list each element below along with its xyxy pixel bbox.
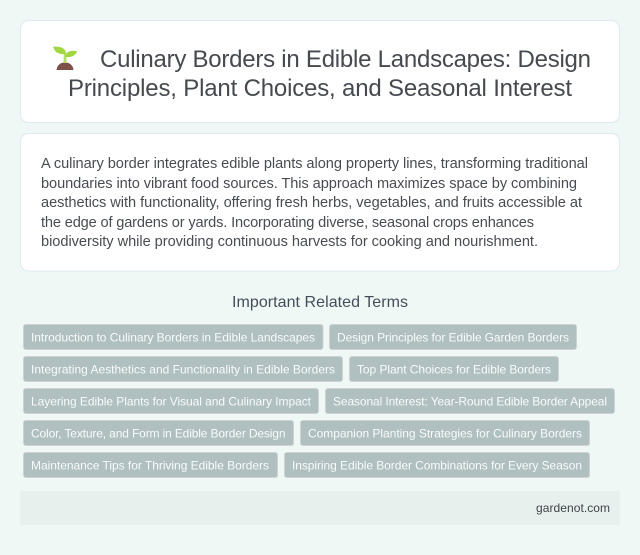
- chip: Color, Texture, and Form in Edible Border Design: [31, 426, 286, 440]
- chip: Inspiring Edible Border Combinations for Every Season: [292, 458, 582, 472]
- text block: description: biodiversity while providing continuous harvests for cooking and nourishment.: [41, 234, 538, 250]
- chip: Introduction to Culinary Borders in Edible Landscapes: [31, 330, 315, 344]
- chip: [24, 452, 278, 478]
- chip: Integrating Aesthetics and Functionality in Edible Borders: [31, 362, 335, 376]
- text block: description: [41, 156, 588, 250]
- panel: term chips: [24, 324, 614, 478]
- chip: Layering Edible Plants for Visual and Culinary Impact: [31, 394, 312, 408]
- chip: Design Principles for Edible Garden Borders: [337, 330, 569, 344]
- title: Culinary Borders in Edible Landscapes: Design: [100, 46, 591, 73]
- chip: [24, 356, 342, 382]
- footer: [20, 491, 620, 525]
- chip: [24, 324, 323, 350]
- text block: description: aesthetics with functionality, offering fresh herbs, vegetables, and fruits accessible at: [41, 195, 582, 211]
- chip: [24, 388, 318, 414]
- title: [68, 46, 591, 102]
- icon: seedling: [53, 47, 77, 70]
- chip: Seasonal Interest: Year-Round Edible Border Appeal: [333, 394, 607, 408]
- chip: [300, 420, 590, 446]
- title: Principles, Plant Choices, and Seasonal Interest: [68, 75, 572, 102]
- chip: [330, 324, 576, 350]
- chip: Top Plant Choices for Edible Borders: [357, 362, 551, 376]
- chip: [326, 388, 614, 414]
- footer: gardenot.com: [536, 501, 610, 515]
- chip: Companion Planting Strategies for Culinary Borders: [308, 426, 582, 440]
- chip: [284, 452, 590, 478]
- text block: description: A culinary border integrates edible plants along property lines, transforming traditional: [41, 156, 588, 172]
- panel: title card: [20, 20, 620, 122]
- panel: description: [20, 134, 620, 271]
- chip: [350, 356, 558, 382]
- text block: description: the edge of gardens or yards. Incorporating diverse, seasonal crops enhances: [41, 215, 534, 231]
- chip: [24, 420, 294, 446]
- heading: related terms: Important Related Terms: [232, 294, 408, 311]
- chip: Maintenance Tips for Thriving Edible Borders: [31, 458, 269, 472]
- text block: description: boundaries into vibrant food sources. This approach maximizes space by combining: [41, 176, 577, 192]
